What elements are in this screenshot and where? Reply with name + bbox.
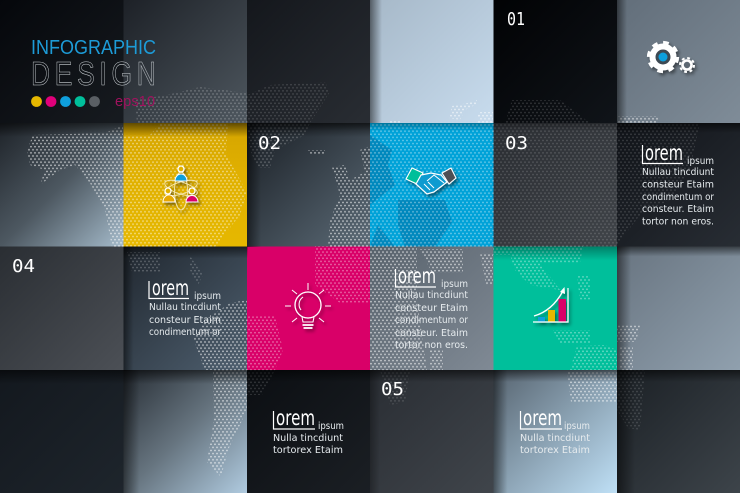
body text: tortorex Etaim: [520, 445, 590, 456]
body text: ipsum: [194, 291, 221, 302]
icon: growth chart: [533, 287, 568, 322]
panel: magenta: [247, 246, 371, 370]
body text: Nulla tincdiunt: [273, 433, 343, 444]
number 01: 01: [507, 9, 525, 30]
body text: consteur Etaim: [395, 303, 468, 314]
lorem logotype: orem: [398, 264, 436, 288]
body text: ipsum: [564, 421, 590, 432]
panel: row 4 column 1: [0, 370, 124, 493]
number 03: 03: [505, 133, 528, 154]
text block: middle: [395, 264, 468, 351]
body text: consteur Etaim: [642, 180, 714, 190]
body text: [520, 421, 590, 456]
body text: [642, 156, 714, 228]
body text: condimentum or: [642, 192, 714, 203]
icon: handshake: [406, 168, 456, 194]
icon: light bulb: [285, 283, 331, 328]
panel: 01: [494, 0, 618, 123]
body text: [149, 291, 221, 338]
panel: cyan: [370, 123, 494, 247]
body text: Nullau tincdiunt: [642, 167, 714, 178]
panel: row 1 column 2: [124, 0, 248, 123]
body text: consteur. Etaim: [395, 328, 468, 339]
body text: Nullau tincdiunt: [395, 290, 468, 301]
number 05: 05: [381, 379, 404, 400]
lorem logotype: orem: [276, 406, 315, 430]
panel: row 1 column 4 light: [370, 0, 494, 123]
text block: bottom centre: [273, 406, 344, 456]
panel: row 4 column 2: [124, 370, 248, 493]
panel: gears: [617, 0, 740, 123]
panel: yellow: [124, 123, 248, 247]
panel: row 3 column 6: [617, 246, 740, 370]
number 04: 04: [12, 256, 35, 277]
title block: [31, 37, 156, 110]
lorem logotype: orem: [645, 141, 683, 165]
body text: consteur. Etaim: [642, 204, 714, 215]
panel: row 2 column 1: [0, 123, 124, 247]
panel: 03: [494, 123, 618, 247]
body text: tortor non eros.: [642, 216, 714, 228]
panel: green: [494, 246, 618, 370]
text block: top right: [642, 141, 714, 228]
panel: row 1 column 3: [247, 0, 371, 123]
icon: gears: [648, 42, 694, 72]
body text: Nullau tincdiunt: [149, 302, 221, 313]
panel: 02: [247, 123, 371, 247]
panel: title background: [0, 0, 124, 123]
body text: tortor non eros.: [395, 340, 468, 351]
panel: 04: [0, 246, 124, 370]
body text: ipsum: [318, 421, 344, 432]
heading: infographic: INFOGRAPHIC: [31, 37, 156, 59]
body text: consteur Etaim: [149, 315, 221, 326]
colour swatches: [31, 96, 100, 107]
lorem logotype: orem: [152, 276, 189, 300]
number 02: 02: [258, 133, 281, 154]
icon: people network: [163, 166, 199, 210]
body text: Nulla tincdiunt: [520, 433, 590, 444]
panel: text 3: [370, 246, 494, 370]
panel: 05: [370, 370, 494, 493]
panel: text 5: [494, 370, 618, 493]
body text: ipsum: [687, 156, 714, 167]
text block: bottom right: [520, 406, 590, 456]
lorem logotype: orem: [523, 406, 562, 430]
dotted world map: [27, 82, 700, 477]
label: eps10: eps10: [115, 93, 155, 110]
panel: text 1: [617, 123, 740, 247]
heading: design: DESIGN: [31, 56, 156, 93]
panel: text 4: [247, 370, 371, 493]
body text: ipsum: [441, 279, 468, 290]
body text: condimentum or: [149, 327, 221, 338]
body text: [395, 279, 468, 351]
panel: row 4 column 6: [617, 370, 740, 493]
body text: tortorex Etaim: [273, 445, 343, 456]
body text: [273, 421, 344, 456]
panel: text 2: [124, 246, 248, 370]
body text: condimentum or: [395, 315, 468, 326]
text block: middle left: [149, 276, 221, 338]
